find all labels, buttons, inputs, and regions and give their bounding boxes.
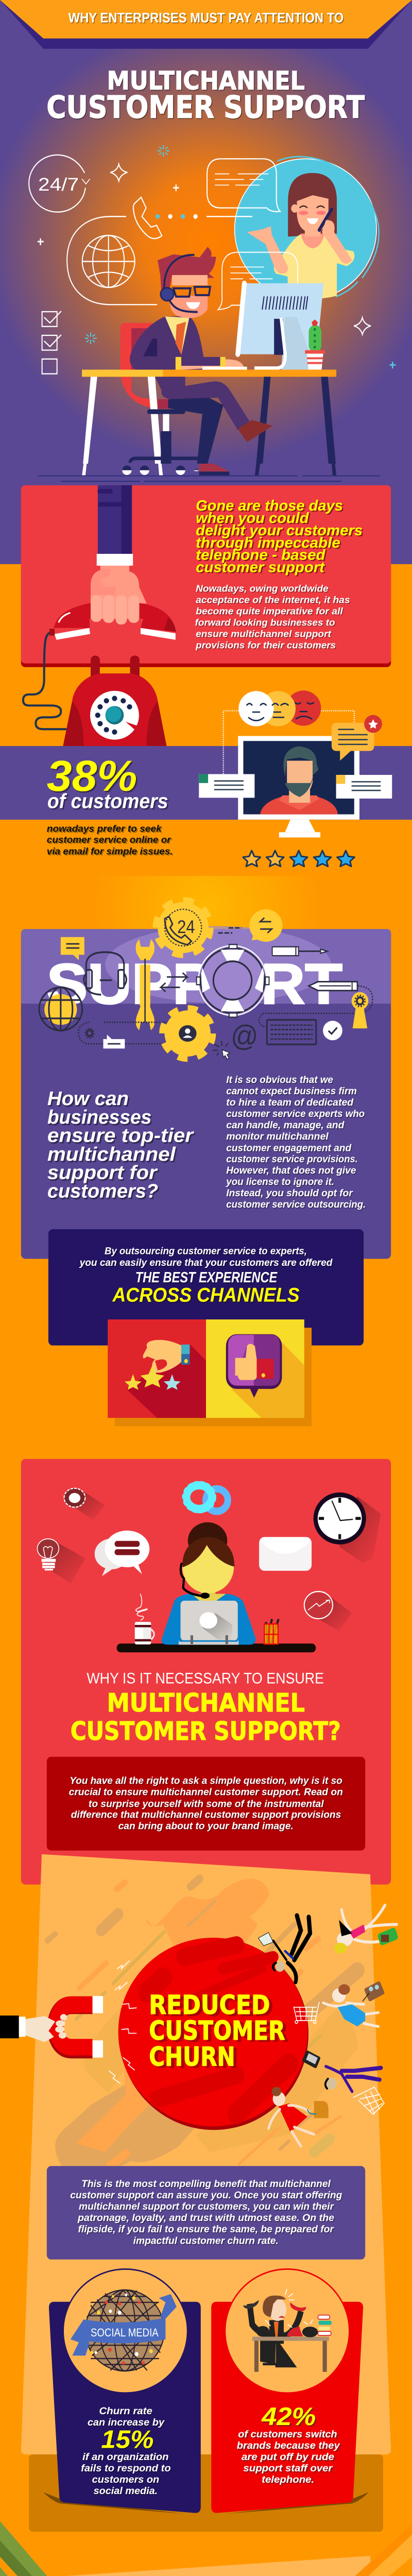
support wordmark: SUPPORT	[47, 953, 342, 1016]
panel heading: through impeccable	[196, 535, 340, 551]
icon: 24/7 clock	[29, 155, 90, 212]
card: churn rate 15%	[49, 2268, 201, 2513]
stat: 38% of customers: via email for simple issues.	[47, 846, 173, 857]
icon: pencil with dotted line	[259, 981, 372, 1027]
callout text: you can easily ensure that your customers are offered	[79, 1257, 333, 1268]
card text: support staff over	[243, 2463, 333, 2473]
panel paragraph: customer engagement and	[226, 1142, 352, 1154]
icon: speech bubble outline top	[207, 159, 280, 212]
icon: double arrows	[161, 973, 187, 992]
icon: lifebuoy	[197, 944, 269, 1017]
churn text box	[47, 2166, 365, 2260]
heading	[71, 1688, 341, 1746]
icon: pencil holder	[264, 1619, 279, 1644]
illustration: monitor with customer	[238, 736, 359, 838]
illustration: stressed office worker	[243, 2289, 332, 2372]
icon: thumbs-up badge	[226, 1334, 282, 1398]
icon: growth chart	[304, 1591, 352, 1631]
panel heading: delight your customers	[196, 522, 363, 539]
icon: shopping cart upper	[294, 2002, 319, 2024]
panel paragraph	[195, 583, 350, 651]
icon: at symbol: @	[231, 1019, 259, 1053]
churn text box: patronage, loyalty, and trust with utmost ease. On the	[77, 2212, 334, 2223]
panel: why multichannel	[21, 1459, 391, 1885]
panel heading	[47, 1088, 194, 1202]
panel heading: customer support	[196, 560, 325, 576]
panel paragraph: Instead, you should opt for	[226, 1188, 353, 1198]
icon: social media globe	[71, 2290, 177, 2371]
icon: 24/7 clock: 24/7	[38, 175, 79, 195]
heading: CUSTOMER	[152, 2018, 288, 2048]
card text: Churn rate	[99, 2405, 152, 2416]
icon: coffee mug	[135, 1594, 154, 1645]
panel paragraph: customer service experts who	[226, 1108, 365, 1119]
card text: 42%	[261, 2402, 316, 2431]
panel paragraph: can handle, manage, and	[226, 1120, 345, 1130]
title: MULTICHANNEL	[107, 66, 305, 95]
panel heading: ensure top-tier	[47, 1125, 194, 1146]
churn text box: multichannel support for customers, you can win their	[79, 2201, 334, 2212]
icon: review card left	[199, 774, 254, 798]
panel paragraph	[226, 1074, 366, 1210]
heading: CUSTOMER SUPPORT?	[71, 1717, 341, 1746]
icon: headset	[84, 952, 126, 995]
heading: CUSTOMER	[149, 2016, 285, 2046]
card text: social media.	[94, 2485, 158, 2496]
card text	[237, 2402, 340, 2485]
panel paragraph: ensure multichannel support	[196, 629, 332, 639]
card text: if an organization	[82, 2451, 169, 2462]
icon: light bulb	[37, 1539, 85, 1584]
heading: CHURN	[152, 2044, 238, 2074]
subheading: WHY IS IT NECESSARY TO ENSURE	[87, 1669, 324, 1687]
icon: hand placing stars	[125, 1340, 190, 1390]
icon: social media globe: SOCIAL MEDIA	[91, 2327, 159, 2339]
illustration: cactus plant	[305, 319, 325, 370]
intro text box	[47, 1757, 365, 1851]
panel heading: multichannel	[47, 1143, 176, 1165]
churn text box: customer support can assure you. Once you start offering	[70, 2190, 342, 2200]
icon: blue gears	[183, 1482, 228, 1512]
intro text box: You have all the right to ask a simple question, why is it so	[70, 1775, 342, 1786]
title: CUSTOMER SUPPORT	[46, 90, 365, 125]
icon: checklist	[42, 311, 61, 374]
stat: 38% of customers: customer service online or	[47, 834, 171, 845]
card text: 15%	[101, 2425, 153, 2453]
illustration: businessman with tablet	[259, 1916, 310, 1982]
panel paragraph: become quite imperative for all	[196, 605, 344, 616]
callout text	[79, 1246, 333, 1306]
icon: ribbon gear badge	[352, 992, 368, 1028]
panel paragraph: customer service provisions.	[226, 1154, 358, 1164]
icon: globe with orbit line	[67, 216, 157, 304]
icon: magnet sparks	[109, 1960, 136, 2083]
icon: five rating stars	[243, 851, 354, 867]
intro text box: can bring about to your brand image.	[118, 1821, 294, 1832]
panel: achieve reputation	[21, 2556, 391, 2576]
icon: screwdriver	[272, 947, 328, 956]
heading: REDUCED	[149, 1991, 270, 2021]
icon: red circle with heading	[118, 1938, 308, 2130]
card text: brands because they	[237, 2440, 340, 2451]
heading: MULTICHANNEL	[107, 1688, 305, 1718]
illustration: agent at desk	[121, 247, 247, 409]
icon: top gear with 24 hour phone: 24	[177, 917, 195, 937]
icon: envelope	[259, 1537, 312, 1571]
card text	[81, 2405, 171, 2496]
icon: dotted path with small gear and note	[78, 1022, 199, 1048]
panel heading: businesses	[47, 1106, 151, 1128]
illustration: man with bag and cart	[302, 2050, 384, 2114]
icon: top gear with 24 hour phone	[156, 900, 211, 955]
panel paragraph: provisions for their customers	[195, 640, 336, 651]
illustration: support tool icons	[39, 900, 372, 1059]
panel heading: How can	[47, 1088, 129, 1109]
icon: feedback speech bubble with star	[332, 715, 382, 761]
callout text: THE BEST EXPERIENCE	[135, 1269, 278, 1286]
icon: globe	[39, 987, 82, 1030]
card text: customers on	[92, 2474, 159, 2485]
intro text box: to surprise yourself with some of the instrumental	[89, 1799, 324, 1809]
panel paragraph: acceptance of the internet, it has	[196, 594, 350, 605]
panel paragraph: you license to ignore it.	[226, 1176, 334, 1187]
icon: satisfaction smileys	[224, 690, 354, 774]
icon: chat bubble	[61, 937, 84, 960]
icon: keyboard	[267, 1020, 316, 1044]
heading: REDUCED	[152, 1992, 273, 2022]
heading: CHURN	[149, 2042, 235, 2072]
card text: of customers switch	[238, 2429, 337, 2439]
panel paragraph: cannot expect business firm	[226, 1086, 357, 1096]
panel paragraph: Nowadays, owing worldwide	[196, 583, 329, 594]
icon: phone and dotted connection line	[133, 197, 252, 239]
callout text: By outsourcing customer service to experts,	[105, 1246, 307, 1257]
illustration: hand lifting telephone receiver	[54, 485, 176, 640]
intro text box: crucial to ensure multichannel customer support. Read on	[69, 1787, 343, 1798]
stat: 38% of customers: 38%	[47, 752, 137, 800]
card: 42% switch brands	[211, 2268, 363, 2513]
panel paragraph: It is so obvious that we	[226, 1074, 333, 1085]
illustration: woman on the phone in circle	[235, 157, 379, 299]
callout text: ACROSS CHANNELS	[112, 1284, 300, 1306]
illustration: rating and thumbs-up tiles	[108, 1319, 312, 1426]
card text: telephone.	[262, 2474, 314, 2485]
panel paragraph: to hire a team of dedicated	[226, 1097, 354, 1108]
illustration: support agent with laptop	[117, 1522, 316, 1652]
panel heading: when you could	[196, 510, 309, 527]
illustration: hands with phone, green sleeves	[0, 2521, 142, 2576]
panel heading: telephone - based	[196, 547, 325, 564]
desk	[82, 370, 336, 464]
churn text box: flipside, if you fail to ensure the same, be prepared for	[78, 2224, 334, 2234]
icon: desk gear	[64, 1488, 105, 1520]
panel: best experience across channels	[48, 1229, 364, 1346]
panel paragraph: However, that does not give	[226, 1165, 356, 1176]
card text: are put off by rude	[242, 2451, 334, 2462]
panel heading: support for	[47, 1162, 158, 1183]
illustration: agent legs and chair base	[130, 377, 273, 464]
panel: reduced customer churn	[21, 1854, 391, 2451]
chair wheels, shoe and ground lines	[38, 464, 380, 481]
icon: chat bubbles	[95, 1531, 149, 1576]
illustration: hands on keyboard, orange sleeves	[254, 2524, 412, 2576]
intro text box: difference that multichannel customer support provisions	[71, 1809, 341, 1820]
panel: how can businesses ensure support	[21, 900, 391, 1259]
illustration: hand with magnet	[0, 1996, 103, 2058]
card text: can increase by	[88, 2417, 165, 2428]
churn text box: impactful customer churn rate.	[133, 2235, 279, 2246]
icon: review card right	[336, 775, 392, 799]
section floor: churn	[29, 2454, 383, 2532]
panel paragraph: monitor multichannel	[226, 1131, 329, 1142]
illustration: woman in blue dress	[323, 1981, 385, 2026]
icon: wrench	[136, 939, 154, 1030]
stat: 38% of customers	[47, 752, 173, 857]
panel heading	[196, 498, 363, 576]
card shadows	[43, 2492, 369, 2514]
illustration: telephone base with cord	[23, 629, 166, 746]
illustration: woman with backpack	[334, 1905, 399, 1954]
stat: 38% of customers: of customers	[47, 790, 168, 812]
churn text box: This is the most compelling benefit that multichannel	[81, 2178, 331, 2189]
panel heading: Gone are those days	[196, 498, 343, 514]
icon: cursor click	[213, 1041, 230, 1059]
card text: fails to respond to	[81, 2463, 171, 2473]
icon: check badge	[323, 1021, 342, 1040]
icon: wall clock	[314, 1493, 381, 1563]
sparkles and plus marks	[38, 145, 396, 368]
illustration: computer monitor	[238, 283, 324, 370]
top banner	[0, 0, 412, 49]
icon: speech bubble outline lower	[218, 252, 298, 310]
panel: gone are those days	[21, 485, 391, 667]
heading	[149, 1991, 288, 2074]
panel paragraph: customer service outsourcing.	[226, 1199, 366, 1210]
title	[46, 66, 365, 125]
panel paragraph: forward looking businesses to	[195, 617, 335, 628]
stat: 38% of customers: nowadays prefer to seek	[47, 823, 162, 834]
banner text: WHY ENTERPRISES MUST PAY ATTENTION TO	[68, 10, 344, 26]
icon: arrows speech bubble	[218, 909, 282, 942]
icon: bottom gear with user	[162, 1008, 213, 1059]
panel heading: customers?	[47, 1180, 158, 1202]
illustration: woman in red dress	[268, 2087, 329, 2146]
